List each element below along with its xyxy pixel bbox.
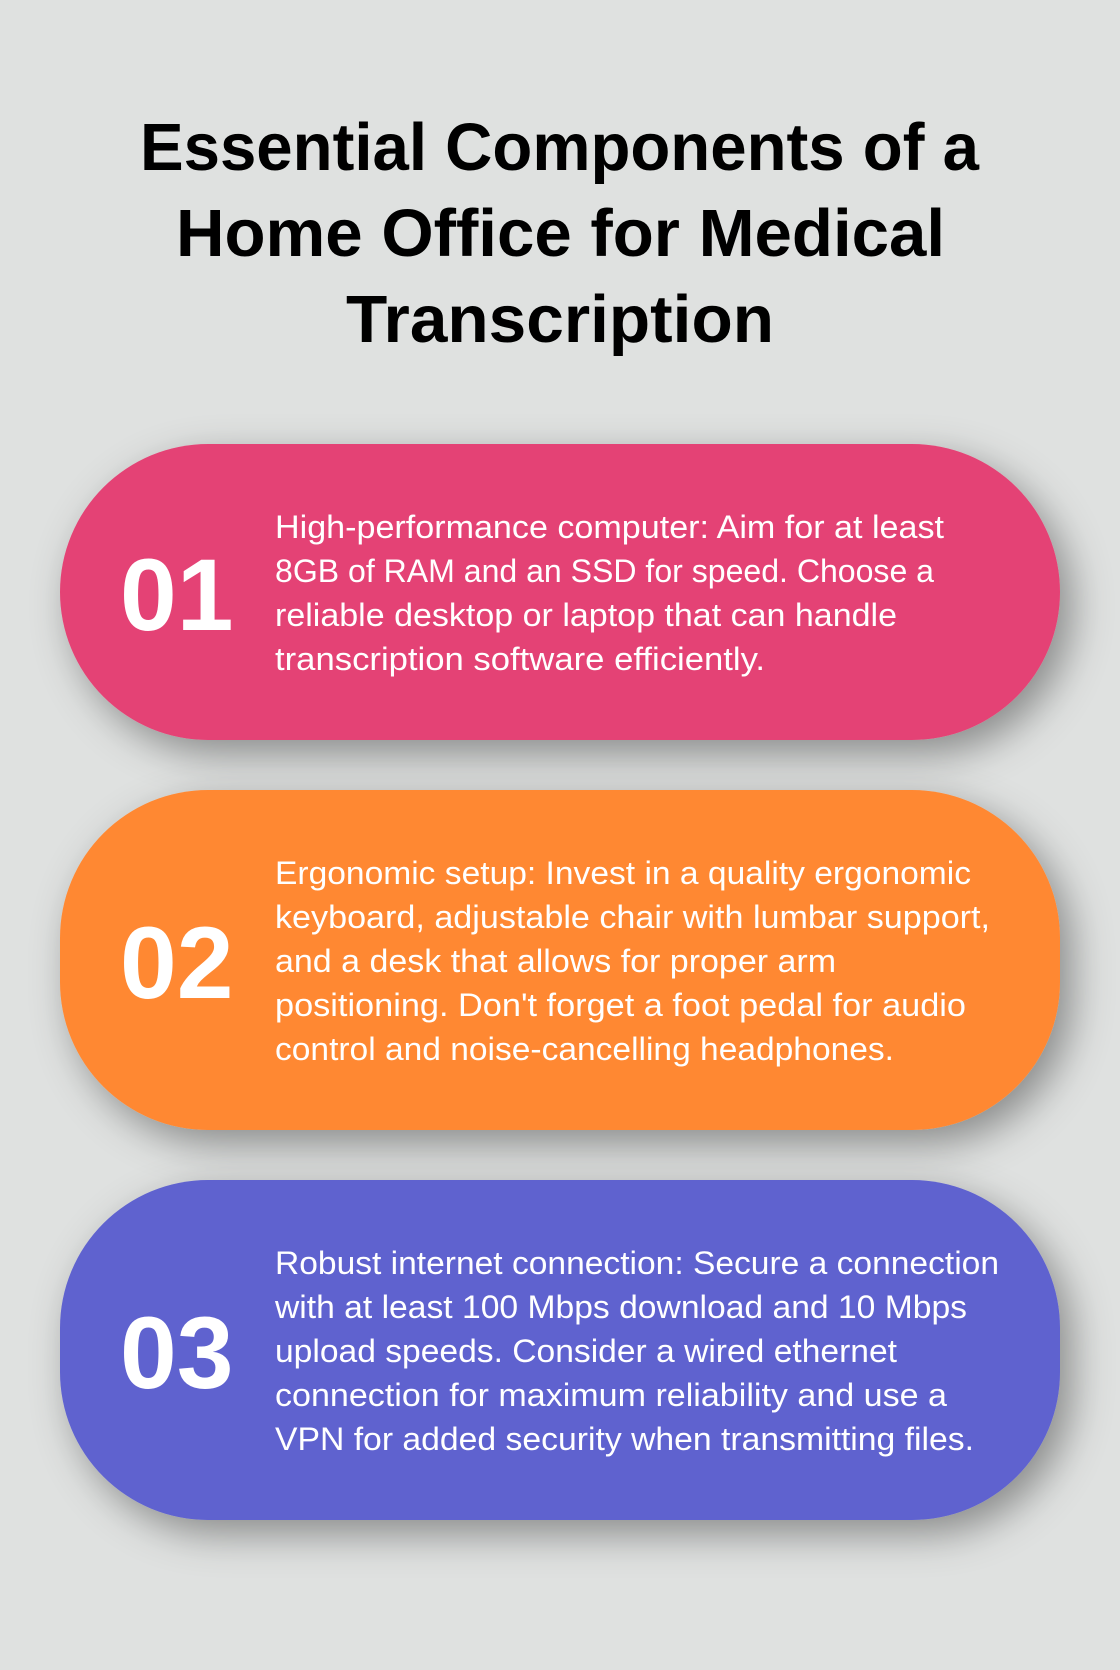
- text block: computer: reliable desktop or laptop that can handle: [275, 597, 897, 633]
- title: Home Office for Medical: [176, 196, 945, 271]
- number 02: 02: [120, 906, 233, 1020]
- title: Essential Components of a: [140, 110, 980, 185]
- panel: high-performance computer: [60, 444, 1060, 740]
- text block: internet: connection for maximum reliability and use a: [275, 1377, 947, 1413]
- text block: computer: 8GB of RAM and an SSD for speed. Choose a: [275, 553, 934, 589]
- text block: computer: [275, 509, 944, 677]
- title: [140, 110, 980, 357]
- orange pill background: [60, 790, 1060, 1130]
- text block: ergonomic: control and noise-cancelling headphones.: [275, 1031, 894, 1067]
- number 01: 01: [120, 538, 233, 652]
- text block: internet: with at least 100 Mbps download and 10 Mbps: [274, 1289, 967, 1325]
- indigo pill background: [60, 1180, 1060, 1520]
- panel: robust internet connection: [60, 1180, 1060, 1520]
- text block: internet: upload speeds. Consider a wired ethernet: [275, 1333, 897, 1369]
- text block: ergonomic: Ergonomic setup: Invest in a quality ergonomic: [275, 855, 971, 891]
- text block: ergonomic: keyboard, adjustable chair with lumbar support,: [275, 899, 990, 935]
- number 03: 03: [120, 1296, 233, 1410]
- text block: internet: [274, 1245, 999, 1457]
- text block: computer: transcription software efficiently.: [275, 641, 765, 677]
- text block: computer: High-performance computer: Aim for at least: [275, 509, 944, 545]
- title: Transcription: [346, 282, 774, 357]
- text block: internet: Robust internet connection: Secure a connection: [275, 1245, 999, 1281]
- text block: ergonomic: [275, 855, 990, 1067]
- text block: ergonomic: and a desk that allows for proper arm: [275, 943, 836, 979]
- panel: ergonomic setup: [60, 790, 1060, 1130]
- pink pill background: [60, 444, 1060, 740]
- text block: internet: VPN for added security when transmitting files.: [275, 1421, 974, 1457]
- text block: ergonomic: positioning. Don't forget a foot pedal for audio: [275, 987, 966, 1023]
